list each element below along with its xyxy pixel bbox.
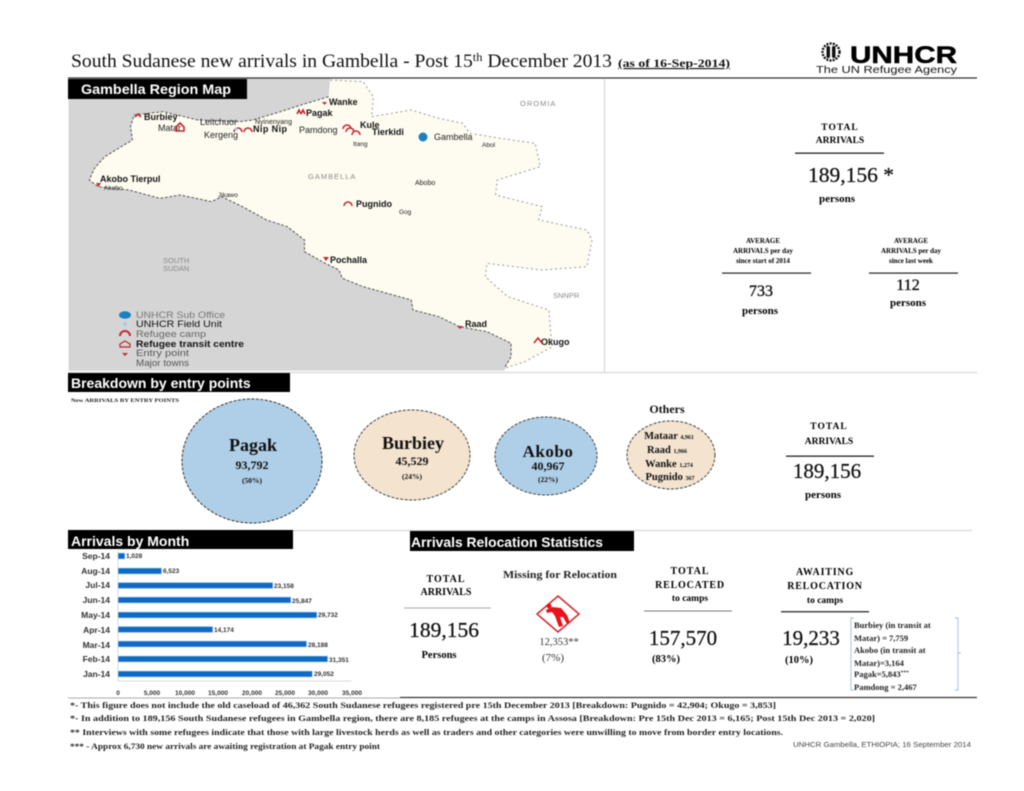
map labels: Pochalla [330,255,368,265]
stat: awaiting relocation: to camps [807,596,843,606]
bubble: Others: Pugnido 367 [646,472,694,483]
map labels: GAMBELLA [308,172,356,181]
stat: total arrivals: persons [819,193,856,205]
stat: awaiting relocation: 19,233 [782,626,840,650]
bubble: Others: Raad 1,966 [647,445,687,456]
map labels: Kergeng [204,130,238,140]
callout: awaiting relocation breakdown: Matar) = 7,759 [854,633,908,643]
bubble: Pagak [182,399,322,523]
stat: total relocated: (83%) [652,654,680,665]
stat: total arrivals: 189,156 * [808,163,894,187]
bar chart: arrivals by month: 15,000 [208,690,228,697]
map legend: Refugee transit centre [136,339,244,349]
heading: Arrivals by Month [68,530,293,549]
stat: relocation total arrivals: TOTAL [426,574,466,585]
stat: missing for relocation: 12,353** [539,637,579,648]
map labels: Burbiey [144,112,178,122]
bar chart: arrivals by month: 28,188 [308,642,328,649]
footnotes: *- This figure does not include the old caseload of 46,362 South Sudanese refugees registered pre 15th December 2013 [Breakdown: Pugnido = 42,904; Okugo = 3,853] [70,700,776,710]
map labels: Pugnido [356,199,392,209]
bubble: Others: Others [649,402,685,416]
map labels: SNNPR [553,291,580,300]
stat: average since start of 2014: persons [742,305,779,317]
icon: falling person warning [537,596,579,632]
map legend [119,310,244,368]
bar chart: arrivals by month [81,551,362,697]
stat: relocation total arrivals: Persons [422,650,456,661]
callout: awaiting relocation breakdown: Pamdong = 2,467 [854,682,917,692]
map labels: Kule [360,120,380,130]
map labels: Abobo [415,180,435,187]
stat: average since last week: persons [890,297,927,309]
footnotes [70,700,875,751]
map labels: Pagak [306,108,334,118]
map labels: Akobo [104,185,123,192]
stat: average since start of 2014: ARRIVALS per day [733,247,794,255]
footnotes: *- In addition to 189,156 South Sudanese refugees in Gambella region, there are 8,185 refugees at the camps in Assosa [Breakdown: Pre 15th Dec 2013 = 6,165; Post 15th Dec 2013 = 2,020] [70,713,875,723]
panel: Gambella region map [69,78,592,371]
heading: Breakdown by entry points: Breakdown by entry points [71,375,251,391]
bar chart: arrivals by month: 0 [116,690,120,697]
bar chart: arrivals by month: Feb-14 [83,654,110,664]
title: (as of 16-Sep-2014) [618,58,730,70]
bar chart: arrivals by month: Jan-14 [83,669,110,679]
divider lines [68,77,977,79]
stat: relocation total arrivals: 189,156 [409,618,479,642]
stat: total relocated [644,566,732,665]
map labels: SUDAN [163,264,189,273]
bubble: Akobo: Akobo [523,442,573,461]
map labels: Raad [465,319,487,329]
heading: Arrivals Relocation Statistics [410,531,634,551]
stat: relocation total arrivals: ARRIVALS [421,587,472,598]
bar chart: arrivals by month: Sep-14 [82,551,110,561]
bar chart: arrivals by month: Aug-14 [81,566,110,576]
stat: average since last week: ARRIVALS per day [881,247,942,255]
small caption: New ARRIVALS BY ENTRY POINTS [71,398,179,404]
bubble: Burbiey: Burbiey [382,433,444,453]
credit line: UNHCR Gambella, ETHIOPIA; 16 September 2014 [793,740,971,749]
bar chart: arrivals by month: May-14 [81,610,110,620]
map labels: Nyinenyang [255,119,292,126]
bar chart: arrivals by month: 31,351 [329,657,349,664]
map labels: OROMIA [520,99,556,108]
stat: missing for relocation [503,570,618,664]
callout: awaiting relocation breakdown: *** [901,670,909,676]
map labels [100,97,580,347]
stat: total arrivals: ARRIVALS [816,136,864,146]
stat: average since start of 2014: since start of 2014 [736,257,790,265]
map labels: Abol [482,142,496,149]
map labels: SOUTH [163,256,189,265]
stat: awaiting relocation: RELOCATION [787,581,863,592]
bar chart: arrivals by month: 20,000 [242,690,262,697]
stat: missing for relocation: Missing for Relocation [503,570,618,581]
stat: total relocated: TOTAL [670,566,710,577]
title: South Sudanese new arrivals in Gambella - Post 15 [71,51,460,72]
bar chart: arrivals by month: 10,000 [175,690,195,697]
callout: awaiting relocation breakdown: Matar)=3,164 [854,658,905,668]
callout: awaiting relocation breakdown [851,618,961,692]
title: December 2013 [482,51,612,72]
bar chart: arrivals by month: 35,000 [342,690,362,697]
bar chart: arrivals by month: 25,000 [275,690,295,697]
bar chart: arrivals by month: 30,000 [308,690,328,697]
bar chart: arrivals by month: Apr-14 [83,625,110,635]
bubble: Others [627,402,715,489]
map labels: Jikawo [218,192,238,199]
logo: UNHCR: UNHCR [850,42,957,69]
stat: missing for relocation: (7%) [542,652,564,664]
stat: total relocated: to camps [672,594,708,604]
bubble: Pagak: 93,792 [236,458,268,472]
map labels: Pamdong [299,125,338,135]
bar chart: arrivals by month: 5,000 [144,690,161,697]
bubble: Akobo: 40,967 [532,459,564,473]
map legend: Major towns [136,358,190,368]
stat: total relocated: RELOCATED [655,580,725,591]
map labels: Nip Nip [253,124,288,134]
bubble: Burbiey: (24%) [402,472,422,481]
bubble: Pagak: Pagak [229,435,277,455]
map labels: Gog [399,209,412,216]
heading: Arrivals by Month: Arrivals by Month [71,533,189,549]
bar chart: arrivals by month: 29,052 [314,671,334,678]
bar chart: arrivals by month: Jun-14 [83,595,110,605]
map legend: UNHCR Sub Office [136,310,225,320]
bar chart: arrivals by month: Mar-14 [83,640,110,650]
callout: awaiting relocation breakdown: Burbiey (in transit at [854,620,931,630]
footnotes: ** Interviews with some refugees indicate that those with large livestock herds as well as traders and other categories were unwilling to move from border entry locations. [70,727,783,737]
bar chart: arrivals by month: 14,174 [214,627,234,634]
stat: breakdown total arrivals: persons [805,489,842,501]
stat: average since start of 2014: 733 [749,283,773,300]
heading: Gambella Region Map: Gambella Region Map [81,81,231,97]
heading: Breakdown by entry points [68,373,290,392]
map labels: Akobo Tierpul [100,174,160,184]
stat: average since start of 2014: AVERAGE [746,237,780,245]
logo: UNHCR [816,42,958,76]
bar chart: arrivals by month: 23,158 [274,583,294,590]
heading: Arrivals Relocation Statistics: Arrivals Relocation Statistics [411,534,603,550]
bubble: Pagak: (50%) [242,476,262,485]
stat: average since last week: 112 [896,277,920,294]
stat: average since start of 2014 [722,237,811,317]
stat: awaiting relocation: AWAITING [796,567,854,578]
stat: average since last week: AVERAGE [894,237,928,245]
logo: UNHCR: The UN Refugee Agency [816,64,958,76]
stat: total arrivals: TOTAL [821,123,859,133]
heading: Gambella Region Map [68,79,247,99]
stat: awaiting relocation [781,567,869,666]
stat: breakdown total arrivals [786,422,874,501]
bubble: Akobo [495,417,597,495]
title [71,50,730,72]
map legend: UNHCR Field Unit [136,319,223,329]
bar chart: arrivals by month: Jul-14 [85,580,110,590]
bubble: Burbiey [354,410,470,500]
stat: awaiting relocation: (10%) [785,655,813,666]
bar chart: arrivals by month: 25,847 [292,598,312,605]
map legend: Refugee camp [136,329,206,339]
map markers [96,102,542,343]
bubble: Akobo: (22%) [538,475,558,484]
stat: breakdown total arrivals: ARRIVALS [805,437,853,447]
map labels: Itang [353,141,368,148]
stat: relocation total arrivals [404,574,491,661]
map labels: Leitchuor [200,117,237,127]
footnotes: *** - Approx 6,730 new arrivals are awaiting registration at Pagak entry point [70,741,380,751]
bar chart: arrivals by month: 6,523 [163,568,180,575]
map legend: Entry point [136,348,190,358]
callout: awaiting relocation breakdown: Pagak=5,843 [854,669,901,679]
map labels: Okugo [541,337,570,347]
map labels: Matar [158,123,181,133]
bubble: Burbiey: 45,529 [396,454,428,468]
map labels: Gambella [434,132,473,142]
stat: average since last week: since last week [889,257,933,265]
bubble: Others: Mataar 4,961 [644,431,694,442]
bubble: Others: Wanke 1,274 [645,459,693,470]
panel: headline stats [722,123,958,317]
stat: total arrivals [795,123,894,205]
map labels: Tierkidi [372,127,404,137]
map labels: Wanke [329,97,358,107]
stat: breakdown total arrivals: TOTAL [810,422,848,432]
callout: awaiting relocation breakdown: Akobo (in transit at [854,645,926,655]
title: th [473,50,482,64]
stat: breakdown total arrivals: 189,156 [793,459,861,483]
bar chart: arrivals by month: 29,732 [318,612,338,619]
stat: average since last week [869,237,958,309]
stat: total relocated: 157,570 [649,626,717,650]
bar chart: arrivals by month: 1,028 [126,553,143,560]
